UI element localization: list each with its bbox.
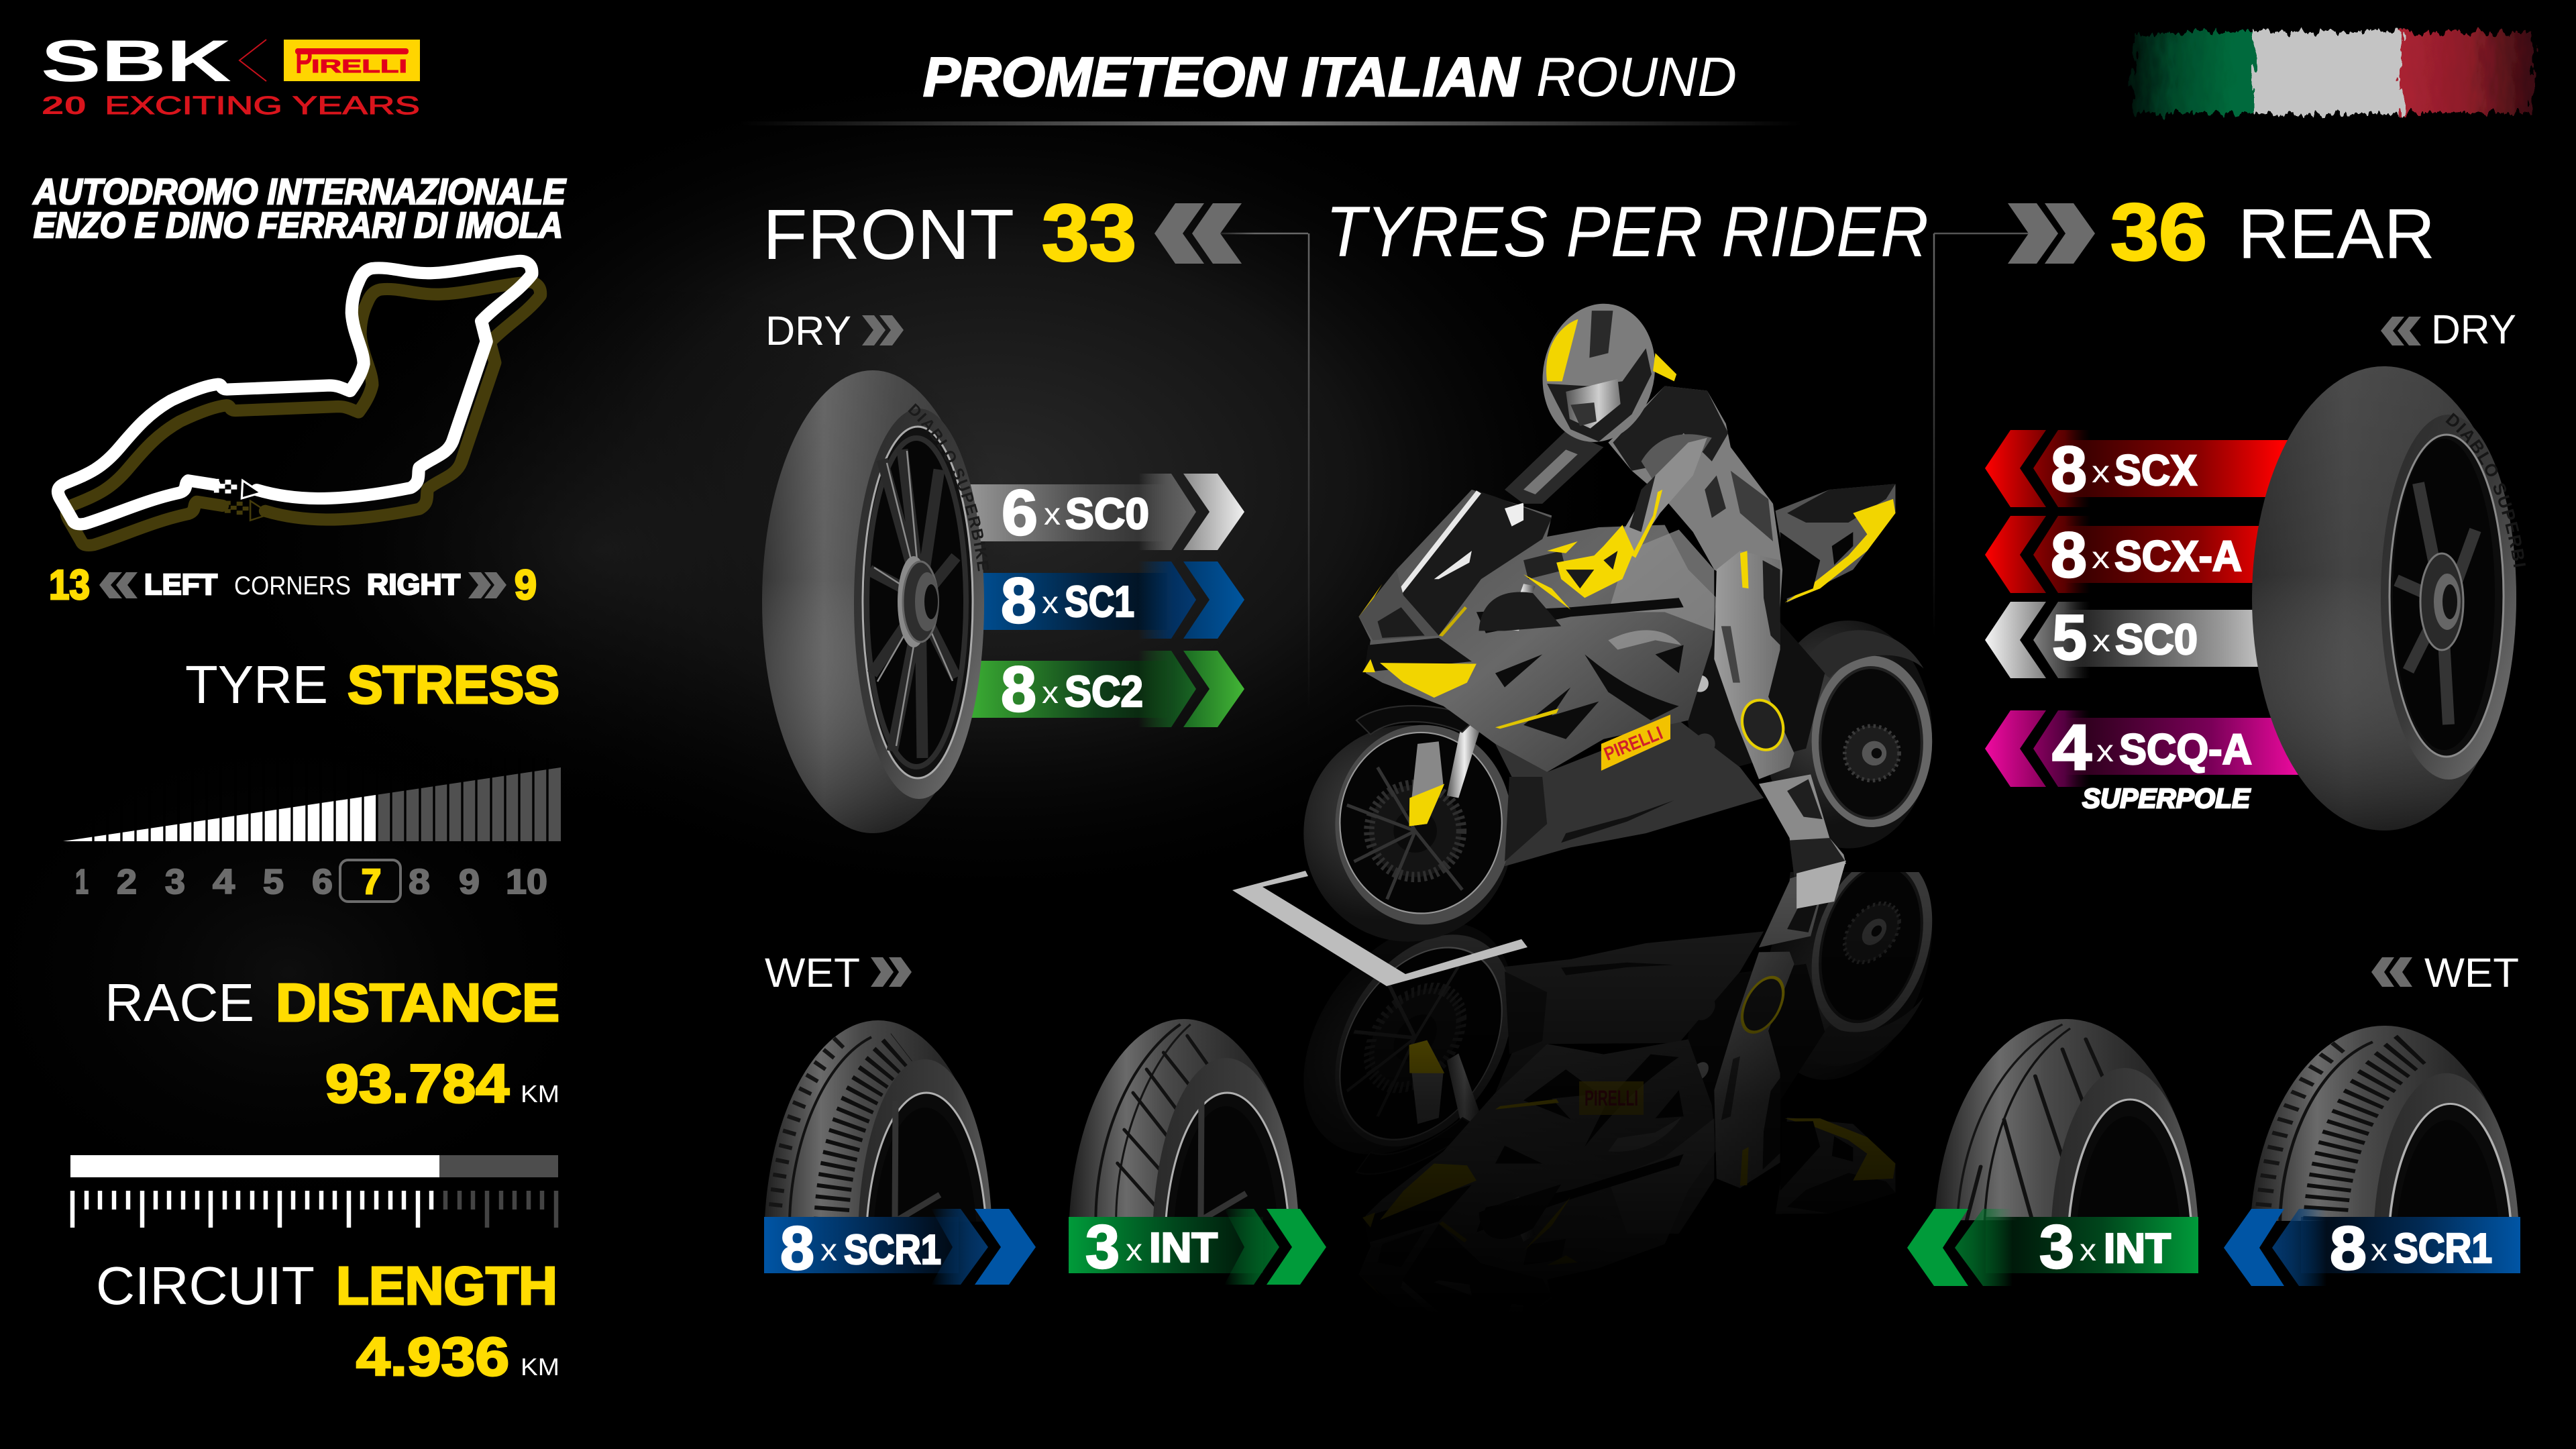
heading: 36 rear <box>2008 187 2435 277</box>
label: rear dry: DRY <box>2431 307 2516 352</box>
tyre stress scale: 10 <box>506 863 547 902</box>
heading: 36 rear: REAR <box>2238 195 2435 274</box>
wet band: rear 8 x SCR1: 8 <box>2330 1214 2367 1283</box>
logo: SBK and Pirelli: 20 <box>42 92 87 120</box>
circuit length: LENGTH <box>336 1256 557 1316</box>
circuit length: KM <box>521 1353 559 1381</box>
wet band: rear 3 x INT: INT <box>2104 1226 2171 1272</box>
wet band: rear 3 x INT: x <box>2080 1232 2096 1267</box>
distance progress bar <box>70 1155 558 1228</box>
heading: front 33: 33 <box>1042 188 1136 278</box>
tyre stress scale: 2 <box>117 863 137 902</box>
compound band: 8 x SC1 <box>966 561 1244 639</box>
compound band: 5 x SC0: 5 <box>2052 602 2087 674</box>
compound band: 8 x SCX-A: x <box>2092 540 2110 575</box>
tyre stress heading: TYRE <box>185 655 328 714</box>
main fairing <box>1358 490 1717 772</box>
label: front wet <box>765 950 912 996</box>
compound band: 8 x SC2 <box>966 651 1244 727</box>
compound band: 8 x SCX <box>1985 430 2293 507</box>
compound band: 6 x SC0: 6 <box>1002 477 1038 549</box>
rear wet tyre: rain <box>2251 1026 2518 1221</box>
wet band: front 3 x INT: x <box>1126 1232 1142 1267</box>
rear wet tyre: intermediate <box>1935 1019 2198 1220</box>
compound band: 4 x SCQ-A superpole: SCQ-A <box>2119 725 2252 773</box>
compound band: 4 x SCQ-A superpole <box>1985 710 2313 814</box>
corners count: LEFT <box>144 568 217 601</box>
engine <box>1665 598 1825 767</box>
front wheel <box>1303 706 1513 942</box>
wet band: rear 3 x INT <box>1907 1209 2198 1286</box>
tank reflections <box>1608 529 1714 631</box>
compound band: 5 x SC0: x <box>2092 623 2110 658</box>
tyre stress heading: STRESS <box>347 655 559 714</box>
race distance: RACE <box>105 973 254 1032</box>
compound band: 6 x SC0 <box>966 474 1244 550</box>
tyre stress scale: 9 <box>459 863 480 902</box>
wet band: front 8 x SCR1: 8 <box>780 1214 814 1283</box>
heading: tyres per rider: TYRES PER RIDER <box>1326 191 1929 272</box>
wet band: front 8 x SCR1 <box>764 1209 1036 1285</box>
corners count: CORNERS <box>234 572 351 600</box>
circuit length: CIRCUIT <box>96 1256 315 1316</box>
rider upper body <box>1505 386 1782 607</box>
logo: SBK and Pirelli: EXCITING YEARS <box>105 92 420 120</box>
tyre stress heading <box>185 655 559 714</box>
wet band: rear 8 x SCR1: x <box>2371 1232 2387 1267</box>
compound band: 6 x SC0: x <box>1044 496 1061 531</box>
tyre stress scale: 3 <box>165 863 185 902</box>
wet band: front 3 x INT: 3 <box>1085 1213 1120 1281</box>
front dry tyre: DIABLO SUPERBIKE <box>908 403 983 572</box>
compound band: 8 x SC2: x <box>1042 675 1059 710</box>
label: front dry: DRY <box>765 308 851 354</box>
compound band: 8 x SCX: x <box>2092 454 2110 489</box>
wet band: front 3 x INT <box>1069 1209 1326 1285</box>
tyre stress scale: 1 <box>75 863 89 902</box>
logo: SBK and Pirelli: P <box>295 41 313 81</box>
wet band: rear 8 x SCR1 <box>2224 1209 2520 1286</box>
rear wheel <box>1764 621 1932 849</box>
front dry tyre <box>762 370 984 833</box>
italian flag <box>2133 31 2532 114</box>
tail <box>1776 484 1896 602</box>
wet band: front 3 x INT: INT <box>1149 1225 1218 1271</box>
far arm <box>1505 431 1603 504</box>
front wet tyre: rain <box>765 1020 991 1222</box>
shin and boot <box>1759 774 1846 875</box>
tyre stress scale: 5 <box>263 863 284 902</box>
label: rear dry <box>2381 307 2516 352</box>
reflection of bike <box>1313 872 1932 1265</box>
title: ROUND <box>1536 46 1737 108</box>
compound band: 4 x SCQ-A superpole: x <box>2096 733 2114 768</box>
tyre stress scale: 6 <box>312 863 333 902</box>
rear dry tyre <box>2252 366 2526 830</box>
corners count <box>49 562 537 608</box>
helmet <box>1530 293 1676 453</box>
label: rear wet: WET <box>2424 950 2519 996</box>
knee slider <box>1735 694 1790 755</box>
compound band: 4 x SCQ-A superpole: SUPERPOLE <box>2082 783 2251 814</box>
label: front wet: WET <box>765 950 860 996</box>
circuit name <box>32 172 567 246</box>
corners count: RIGHT <box>367 568 460 601</box>
corners count: 9 <box>515 562 537 608</box>
tyre stress scale: 7 <box>362 863 381 902</box>
near arm <box>1613 438 1707 555</box>
wet band: front 8 x SCR1: x <box>820 1232 837 1267</box>
rider leg <box>1714 551 1846 908</box>
compound band: 8 x SC1: x <box>1042 585 1059 620</box>
circuit name: AUTODROMO INTERNAZIONALE <box>32 172 567 212</box>
windscreen <box>1397 490 1552 635</box>
compound band: 8 x SC1: SC1 <box>1065 577 1134 626</box>
heading: front 33 <box>763 188 1242 278</box>
race distance <box>105 973 559 1114</box>
logo: SBK and Pirelli: SBK <box>41 28 231 94</box>
front wet tyre: intermediate <box>1069 1019 1298 1217</box>
logo: SBK and Pirelli <box>41 28 420 120</box>
corners count: 13 <box>49 562 90 608</box>
compound band: 4 x SCQ-A superpole: 4 <box>2052 712 2092 784</box>
connector lines <box>1220 233 2033 711</box>
lower fairing <box>1495 720 1764 866</box>
compound band: 8 x SCX-A <box>1985 516 2293 593</box>
tyre stress scale: 4 <box>213 863 235 902</box>
title: PROMETEON ITALIAN <box>923 46 1521 108</box>
wet band: rear 3 x INT: 3 <box>2039 1213 2074 1281</box>
compound band: 5 x SC0 <box>1985 602 2293 678</box>
label: rear wet <box>2371 950 2519 996</box>
circuit name: ENZO E DINO FERRARI DI IMOLA <box>34 205 563 246</box>
compound band: 8 x SC2: SC2 <box>1065 667 1143 716</box>
pirelli sticker on bike: PIRELLI <box>1601 722 1666 765</box>
glove <box>1556 525 1634 598</box>
motorcycle <box>1303 484 1932 942</box>
compound band: 8 x SCX-A: SCX-A <box>2114 532 2242 580</box>
circuit map <box>58 261 541 545</box>
headlight yellow <box>1380 663 1477 698</box>
wet band: rear 8 x SCR1: SCR1 <box>2394 1226 2492 1272</box>
tyre stress scale: 8 <box>409 863 430 902</box>
compound band: 8 x SC2: 8 <box>1001 653 1036 725</box>
race distance: DISTANCE <box>276 973 559 1032</box>
wet band: front 8 x SCR1: SCR1 <box>844 1227 941 1273</box>
torso <box>1608 386 1782 607</box>
label: front dry <box>765 308 904 354</box>
compound band: 8 x SCX: SCX <box>2114 446 2197 494</box>
compound band: 8 x SCX-A: 8 <box>2051 519 2087 591</box>
reflection of bike: PIRELLI <box>1585 1086 1638 1110</box>
fairing graphics <box>1477 598 1684 739</box>
fork and bars <box>1507 584 1536 631</box>
logo: SBK and Pirelli: IRELLI <box>311 56 407 76</box>
circuit length: 4.936 <box>356 1327 509 1387</box>
race distance: 93.784 <box>325 1054 509 1114</box>
circuit length <box>96 1256 559 1387</box>
compound band: 5 x SC0: SC0 <box>2115 615 2198 663</box>
tyre stress scale <box>63 758 561 902</box>
compound band: 6 x SC0: SC0 <box>1065 489 1149 538</box>
heading: 36 rear: 36 <box>2110 187 2207 277</box>
pit box marking <box>1232 871 1527 986</box>
compound band: 8 x SC1: 8 <box>1001 565 1036 637</box>
compound band: 8 x SCX: 8 <box>2051 433 2087 505</box>
heading: front 33: FRONT <box>763 195 1014 274</box>
race distance: KM <box>521 1080 559 1108</box>
